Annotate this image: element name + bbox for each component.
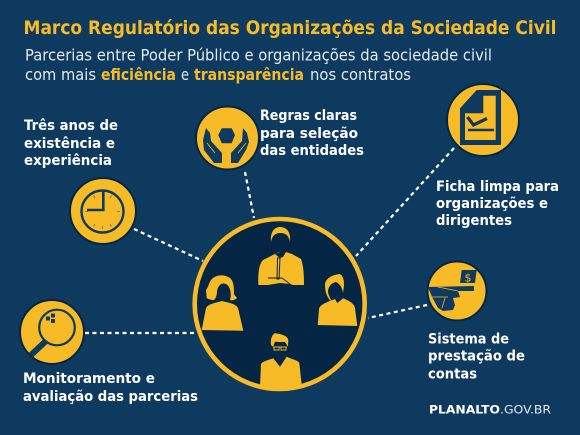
label: ficha limpa: Ficha limpa para (436, 179, 559, 195)
label: regras claras (260, 108, 364, 159)
subtitle: nos contratos (310, 66, 411, 84)
label: ficha limpa: dirigentes (436, 213, 512, 229)
logo text: .GOV.BR (500, 402, 551, 416)
label: prestação de contas: prestação de (428, 349, 525, 365)
central circle: people (195, 219, 365, 389)
label: três anos: experiência (24, 153, 112, 169)
icon: clock (70, 178, 136, 244)
label: monitoramento: Monitoramento e (23, 371, 155, 387)
subtitle (25, 47, 492, 84)
icon: hands with ball (196, 106, 259, 170)
label: ficha limpa (436, 179, 559, 229)
label: prestação de contas: contas (428, 366, 477, 382)
connector lines (85, 148, 454, 333)
person: man with tie (258, 227, 304, 285)
subtitle: transparência (194, 66, 304, 84)
label: regras claras: das entidades (260, 143, 364, 159)
subtitle: eficiência (101, 66, 176, 84)
icon: hand holding money: $ (464, 272, 472, 284)
label: três anos (24, 118, 118, 169)
label: regras claras: para seleção (260, 126, 358, 142)
person: woman right (318, 274, 357, 326)
label: prestação de contas: Sistema de (428, 331, 509, 347)
subtitle: Parcerias entre Poder Público e organizações da sociedade civil (25, 47, 492, 65)
icon: magnifying glass (20, 300, 84, 364)
person: man with glasses (260, 333, 302, 388)
icon: document with check (447, 84, 519, 156)
subtitle: e (181, 66, 189, 84)
logo text (429, 402, 551, 416)
label: regras claras: Regras claras (260, 108, 357, 124)
label: três anos: existência e (24, 136, 115, 152)
person: woman left (202, 275, 243, 331)
label: monitoramento (23, 371, 198, 405)
label: prestação de contas (428, 331, 525, 382)
subtitle: com mais (25, 66, 96, 84)
label: monitoramento: avaliação das parcerias (23, 389, 198, 405)
label: ficha limpa: organizações e (436, 196, 548, 212)
logo text: PLANALTO (429, 402, 500, 416)
icon: hand holding money (428, 262, 486, 320)
label: três anos: Três anos de (24, 118, 118, 134)
